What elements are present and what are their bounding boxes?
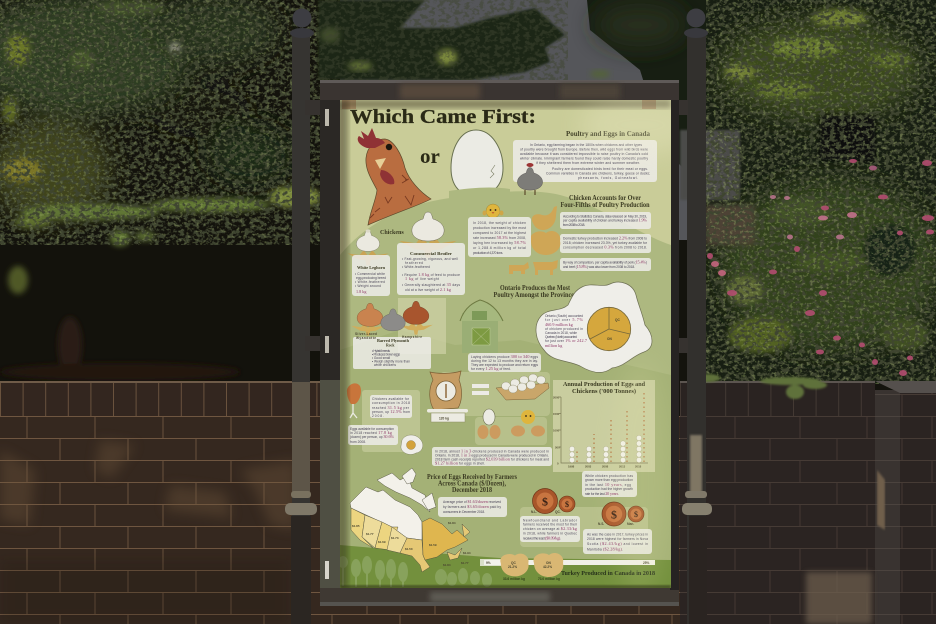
icon: feed sack on scale: 120 kg bbox=[439, 416, 449, 420]
icon: three brown-egg chickens bbox=[351, 301, 433, 336]
text block: commercial broiler: • Generally slaughtered at 35 days bbox=[402, 282, 460, 287]
text block: ontario share: for just over 1% or 242.7 bbox=[545, 338, 587, 343]
text block: chicken weight: or 1,288.6 million kg of total bbox=[473, 246, 526, 250]
text block: chicken weight: compared to 2017 at the highest bbox=[473, 231, 526, 235]
text block: white leghorn: 1.8 kg bbox=[356, 289, 367, 294]
text block: egg consumption bbox=[348, 425, 398, 445]
text block: breed names: • Hybrid breeds bbox=[372, 349, 390, 353]
hill background bbox=[340, 191, 671, 375]
icon: trailing plant over wall bbox=[696, 374, 827, 399]
text block: production bbox=[560, 234, 651, 253]
icons: gold turkeys: 21.2% bbox=[508, 565, 517, 569]
text block: egg consumption: in 2018 reached 17.8 kg bbox=[350, 430, 393, 435]
bar chart: annual production of eggs and chickens: 2013 bbox=[619, 464, 626, 468]
icon: white leghorn bbox=[348, 229, 388, 256]
text block: breed names: Wyandotte bbox=[356, 336, 376, 340]
text block: commercial broiler bbox=[397, 243, 465, 295]
text block: map labels: $1.85 bbox=[352, 524, 360, 528]
text block: growth: rate for the last 20 years. bbox=[585, 491, 619, 496]
text block: egg consumption: Eggs available for consumption bbox=[350, 427, 394, 431]
chart: yolk pie: QC bbox=[615, 318, 620, 322]
text block: poultry intro: available because it was considered impossible to raise poultry in Canada's cold bbox=[520, 152, 648, 156]
text block: chicken consumption: person, up 12.5% from bbox=[372, 409, 410, 414]
text block: breed names: • Good small bbox=[372, 356, 390, 360]
chart: yolk pie bbox=[587, 307, 631, 351]
text block: chicken weight: production of 4,370 tons. bbox=[473, 251, 503, 255]
turkey bar bbox=[480, 559, 655, 566]
bar chart: annual production of eggs and chickens: 1000 bbox=[553, 428, 560, 432]
text block: production: consumption decreased 0.3% from 2008 to 2018. bbox=[563, 244, 647, 250]
text block: ontario share: of chicken produced in bbox=[545, 327, 583, 331]
text block: ontario share: 460.9 million kg bbox=[545, 322, 574, 327]
light and shadow on poster bbox=[336, 95, 700, 600]
icons: gold turkeys bbox=[500, 553, 563, 581]
text block: commercial broiler: • White-feathered bbox=[402, 265, 430, 269]
icons: gold turkeys: 33.6 million kg bbox=[503, 577, 525, 581]
right display post bbox=[670, 8, 712, 624]
text block: breed names: Barred Plymouth bbox=[377, 339, 410, 343]
icons: gold turkeys: 42.2% bbox=[543, 565, 552, 569]
text block: ontario share: Ontario (South) accounted bbox=[545, 314, 583, 318]
pale panel: coins bbox=[520, 507, 648, 547]
text block: white leghorn: • Commercial white bbox=[355, 272, 385, 276]
text block: newfoundland: farmers received the most for their bbox=[523, 522, 578, 526]
text block: poultry intro: Poultry are domesticated birds bred for their meat or eggs. bbox=[552, 167, 648, 171]
mid green field bbox=[349, 331, 671, 560]
text block: white leghorn: • Weight around bbox=[355, 284, 381, 288]
bar chart: annual production of eggs and chickens: Chickens ('000 Tonnes) bbox=[572, 388, 636, 395]
icons: dollar coins bbox=[532, 488, 644, 526]
text block: chicken weight: production increased by the most bbox=[473, 226, 526, 230]
icon: egg bbox=[449, 130, 510, 199]
text block: PEI: As was the case in 2017, turkey prices in bbox=[587, 532, 648, 536]
bar chart: annual production of eggs and chickens: 2018 bbox=[635, 464, 642, 468]
heading: chicken accounts: Chicken Accounts for Over bbox=[569, 194, 641, 202]
text block: map labels: $1.77 bbox=[366, 532, 374, 536]
text block: poultry intro: if they sheltered them from extreme winter and summer weather. bbox=[536, 161, 640, 165]
text block: poultry intro: pheasants, fowls, Guineafowl. bbox=[578, 176, 638, 180]
text block: availability: According to Statistics Canada, data released on May 30, 2019, bbox=[563, 214, 647, 218]
background: central pine branch bbox=[318, 0, 610, 80]
text block: poultry intro: of poultry were brought from Europe. Before then, wild eggs from wild birds were bbox=[520, 148, 648, 152]
bar chart: annual production of eggs and chickens: Annual Production of Eggs and bbox=[563, 381, 645, 388]
coin labels: QC. bbox=[555, 510, 561, 514]
icons: gold turkeys: QC bbox=[511, 561, 516, 565]
text block: availability: from 2008 to 2018. bbox=[563, 223, 585, 227]
coin labels bbox=[531, 510, 634, 526]
icons: dollar coins: $ bbox=[542, 494, 548, 508]
poster background bbox=[340, 100, 671, 255]
text block: comparison bbox=[560, 258, 651, 271]
text block: white leghorn: White Leghorn bbox=[357, 265, 386, 270]
poster: Across Canada ($/Dozen), bbox=[438, 480, 506, 488]
text block: average price: Average price of $1.63/dozen received bbox=[443, 499, 501, 504]
text block: map labels: $1.59 bbox=[429, 543, 437, 547]
text block: ontario share: for just over 5.7% bbox=[545, 317, 584, 322]
right brick wall and pillar bbox=[680, 381, 936, 624]
text block: growth: While chicken production has bbox=[585, 474, 633, 478]
icons: gold turkeys: ON bbox=[546, 561, 551, 565]
poster: Four-Fifths of Poultry Production bbox=[560, 201, 650, 209]
text block: availability bbox=[560, 212, 651, 229]
chart: yolk pie: ON bbox=[607, 337, 612, 341]
icon: commercial broiler bbox=[400, 212, 456, 243]
text block: newfoundland: in 2018, while farmers in Quebec bbox=[523, 532, 577, 536]
background: right foliage and flowering shrub bbox=[587, 0, 936, 384]
text block: laying chickens: for every 1.25 kg of feed. bbox=[471, 366, 511, 371]
text block: availability: per capita availability of chicken and turkey increased 1.9% bbox=[563, 218, 648, 223]
text block: commercial broiler: • Require 1.8 kg of feed to produce bbox=[402, 272, 460, 277]
icon: chick bbox=[482, 204, 504, 218]
text block: laying chickens: during the 12 to 13 months they are in lay. bbox=[471, 359, 538, 363]
title: Which Came First: bbox=[350, 106, 536, 128]
text block: ontario share bbox=[545, 314, 587, 348]
text block: chicken weight bbox=[468, 217, 531, 257]
text block: breed names bbox=[353, 332, 431, 369]
pale panel: breeds bbox=[398, 298, 446, 354]
display case frame bbox=[320, 80, 679, 606]
text block: production rates: Ontario. In 2018, 1 in 3 eggs produced in Canada were produced in Ontario. bbox=[435, 452, 549, 458]
text block: white leghorn: egg-producing breed bbox=[356, 276, 386, 280]
text block: comparison: and beef (15.8%) was also lower from 2008 to 2018. bbox=[563, 264, 635, 269]
background: left evergreen tree bbox=[0, 0, 340, 384]
text block: PEI: Manitoba ($2.28/kg). bbox=[587, 546, 623, 552]
icon: egg carton bbox=[496, 374, 549, 400]
text block: chicken consumption: consumption in 2018 bbox=[372, 401, 410, 405]
icons: dollar coins: $ bbox=[565, 500, 569, 509]
text block: average price: consumers in December 2018. bbox=[443, 510, 485, 514]
icon: eggs and chick bbox=[478, 409, 545, 439]
bar chart: annual production of eggs and chickens: 1500 bbox=[553, 412, 560, 416]
text block: production rates: In 2018, almost 1 in 3 chickens produced in Canada were produced in bbox=[435, 448, 549, 454]
icon: small fried egg bbox=[401, 435, 423, 454]
text block: production: 2018; chicken increased 23.3%, yet turkey available for bbox=[563, 241, 648, 245]
text block: chicken consumption bbox=[370, 395, 412, 418]
text block: growth: production had the higher growth bbox=[585, 487, 633, 491]
text block: map labels: $1.50 bbox=[405, 547, 413, 551]
bar chart: annual production of eggs and chickens: 2000 bbox=[553, 396, 560, 400]
text block: commercial broiler: • Fast-growing, vigorous, and well bbox=[402, 257, 458, 261]
text block: chicken weight: rate increased 58.3% from 2008, bbox=[473, 235, 526, 240]
poster: Poultry Amongst the Provinces bbox=[494, 292, 577, 299]
text block: PEI: Scotia ($2.43/kg) and lowest in bbox=[587, 541, 648, 546]
text block: white leghorn bbox=[352, 255, 390, 296]
text block: laying chickens: They are expected to produce and return eggs bbox=[471, 363, 538, 367]
text block: map labels: $1.77 bbox=[461, 561, 469, 565]
text block: breed names: white chickens bbox=[374, 363, 396, 367]
bottom hill bbox=[340, 545, 671, 588]
text block: chicken weight: In 2018, the weight of chicken bbox=[473, 221, 526, 225]
icons: pink flowers bbox=[707, 159, 934, 376]
text block: egg consumption: (dozen) per person, up 30.6% bbox=[350, 434, 394, 439]
corner tapes bbox=[342, 100, 656, 109]
text block: comparison: By way of comparison, per capita availability of pork (15.4%) bbox=[563, 260, 647, 264]
pale panel: chart bbox=[553, 380, 655, 472]
text block: poultry intro: In Ontario, egg farming began in the 1800s when chickens and other types bbox=[530, 143, 642, 147]
text block: breed names: Silver-Laced bbox=[355, 332, 377, 336]
poster: December 2018 bbox=[452, 487, 493, 494]
text block: chicken consumption: Chickens available for bbox=[372, 397, 410, 401]
bar chart: annual production of eggs and chickens: 1998 bbox=[568, 464, 575, 468]
icons: dollar coins: $ bbox=[611, 508, 617, 522]
text block: map labels: $1.69 bbox=[378, 540, 386, 544]
icons: gold animals bbox=[509, 206, 560, 275]
text block: breed names: • Produces brown eggs bbox=[372, 352, 400, 356]
text block: egg consumption: from 2008. bbox=[350, 440, 366, 444]
text block: poultry intro bbox=[513, 140, 657, 182]
trees bbox=[338, 556, 492, 587]
text block: breed names: Hampshire bbox=[402, 335, 422, 339]
text block: PEI: 2018 were highest for farmers in Nova bbox=[587, 537, 648, 541]
text block: production: Domestic turkey production increased 2.2% from 2008 to bbox=[563, 236, 647, 240]
icons: gold turkeys: 73.0 million kg bbox=[538, 577, 560, 581]
text block: breed names: Rock bbox=[386, 344, 395, 348]
poster bbox=[340, 100, 671, 588]
text block: production rates bbox=[432, 447, 552, 466]
text block: map labels: $1.73 bbox=[391, 536, 399, 540]
map: egg prices across Canada bbox=[350, 468, 470, 572]
left display post bbox=[285, 8, 323, 624]
text block: laying chickens bbox=[468, 353, 541, 372]
text block: map labels: $1.94 bbox=[463, 551, 471, 555]
icon: feed sack on scale bbox=[427, 371, 468, 422]
heading: or: or bbox=[420, 144, 440, 168]
text block: chicken consumption: reached 31.5 kg per bbox=[372, 405, 410, 410]
text block: newfoundland: Newfoundland and Labrador bbox=[523, 518, 578, 522]
icon: drumstick bbox=[347, 383, 361, 418]
text block: newfoundland: chicken on average at $2.33/kg bbox=[523, 526, 578, 531]
text block: commercial broiler: Commercial Broiler bbox=[410, 251, 452, 256]
left brick wall bbox=[0, 381, 680, 624]
pale panel: consumption bbox=[362, 390, 420, 452]
text block: map labels: $1.84 bbox=[443, 563, 451, 567]
text block: map labels bbox=[352, 521, 471, 567]
turkey bar: 25% bbox=[643, 561, 650, 565]
text block: newfoundland: received the least ($0.09/kg). bbox=[523, 536, 561, 540]
text block: ontario share: Quebec (North) accounted bbox=[545, 335, 577, 339]
text block: production rates: $1.27 billion for eggs in shell. bbox=[435, 460, 485, 466]
text block: white leghorn: • White-feathered bbox=[355, 280, 385, 284]
label: chickens: Chickens bbox=[380, 230, 404, 236]
icon: grey hen bbox=[517, 163, 543, 195]
pale panel: feed conversion bbox=[440, 372, 550, 416]
text block: breed names: • Weigh slightly more than bbox=[372, 360, 410, 364]
text block: poultry intro: winter climate. Immigrant farmers found they could raise hardy domestic poultry bbox=[520, 156, 648, 160]
text block: commercial broiler: 1 kg of live weight bbox=[405, 276, 439, 281]
icon: hen bbox=[358, 128, 431, 225]
coin labels: N.S. bbox=[598, 522, 604, 526]
heading: turkey produced: Turkey Produced in Canada in 2018 bbox=[561, 570, 655, 577]
text block: average price: by farmers and $3.65/dozen paid by bbox=[443, 504, 501, 509]
coin labels: Man. bbox=[627, 522, 634, 526]
text block: laying chickens: Laying chickens produce 300 to 340 eggs bbox=[471, 354, 538, 359]
icon: barn bbox=[460, 300, 503, 353]
icon: equals sign bbox=[472, 384, 489, 395]
pale panel: eggs and chicks bbox=[475, 417, 547, 445]
text block: growth: grown more than egg production bbox=[585, 478, 633, 482]
text block: chicken weight: laying hen increased by 58.7% bbox=[473, 240, 526, 245]
text block: newfoundland bbox=[520, 516, 580, 542]
icons: dollar coins: $ bbox=[634, 510, 638, 519]
heading: ontario produces: Ontario Produces the Most bbox=[500, 285, 571, 292]
text block: production rates: 2018 farm cash receipts reported $2,039 billion for chickens for meat and bbox=[435, 456, 549, 462]
bar chart: annual production of eggs and chickens: 2008 bbox=[602, 464, 609, 468]
text block: poultry intro: Common varieties in Canada are chickens, turkey, geese or ducks; bbox=[546, 172, 650, 176]
turkey bar: 9% bbox=[486, 561, 491, 565]
text block: average price bbox=[438, 497, 507, 517]
text block: PEI bbox=[583, 529, 652, 554]
text block: growth bbox=[582, 471, 637, 497]
background: grey building wall bbox=[300, 0, 720, 240]
heading: price of eggs: Price of Eggs Received by Farmers bbox=[427, 474, 517, 481]
text block: growth: in the last 10 years, egg bbox=[585, 482, 631, 487]
heading: poultry and eggs: Poultry and Eggs in Canada bbox=[566, 129, 650, 138]
coin labels: N.L. bbox=[531, 510, 537, 514]
bar chart: annual production of eggs and chickens: 500 bbox=[555, 446, 560, 450]
fried egg pie chart bbox=[536, 282, 652, 372]
text block: commercial broiler: old at a live weight of 2.1 kg bbox=[405, 287, 452, 292]
bar chart: annual production of eggs and chickens bbox=[553, 381, 648, 468]
bar chart: annual production of eggs and chickens: 2003 bbox=[585, 464, 592, 468]
text block: ontario share: million kg bbox=[545, 343, 563, 348]
text block: chicken consumption: 2008. bbox=[372, 414, 384, 418]
text block: map labels: $1.84 bbox=[448, 521, 456, 525]
text block: ontario share: Canada in 2018, while bbox=[545, 331, 577, 335]
text block: commercial broiler: feathered bbox=[405, 261, 423, 265]
bar chart: annual production of eggs and chickens: 0 bbox=[557, 462, 559, 466]
